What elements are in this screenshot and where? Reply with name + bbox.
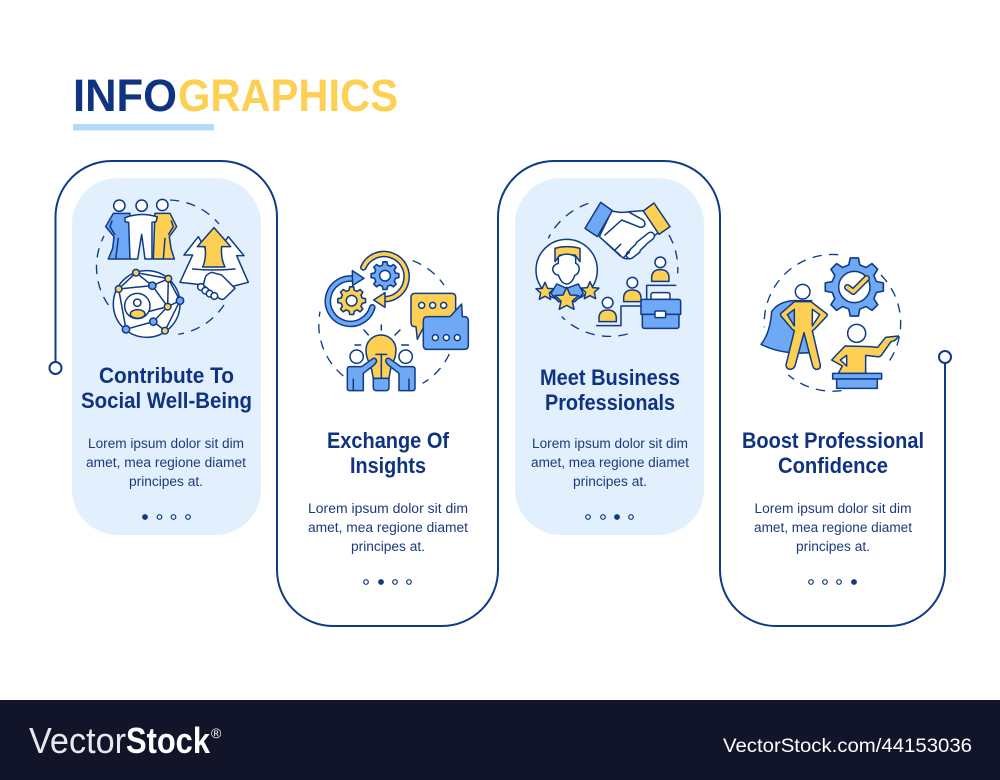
pagination dots: card 2 bbox=[364, 580, 411, 584]
card 3 text bbox=[531, 365, 689, 489]
cycle arrows and gears bbox=[328, 254, 407, 324]
body text: card 1 bbox=[86, 436, 246, 489]
pagination dots: card 3 bbox=[586, 515, 633, 519]
body text: card 4 bbox=[754, 501, 912, 554]
body text: card 1: principes at. bbox=[129, 474, 203, 489]
handshake bbox=[585, 202, 670, 259]
pagination dots: card 1 bbox=[143, 515, 190, 519]
footer logo: Stock bbox=[126, 720, 211, 761]
gear with check mark bbox=[825, 258, 883, 316]
panel background: card 1 bbox=[72, 178, 261, 535]
card 2 text bbox=[308, 428, 468, 554]
card 4 text bbox=[742, 428, 924, 554]
person with cape bbox=[761, 284, 827, 369]
heading: card 4: Confidence bbox=[778, 453, 888, 478]
title bbox=[73, 70, 398, 121]
icon: community, growth and network bbox=[96, 199, 248, 337]
title: GRAPHICS bbox=[178, 70, 398, 121]
body text: card 4: amet, mea regione diamet bbox=[754, 520, 912, 535]
footer logo: ® bbox=[211, 725, 222, 741]
footer logo bbox=[29, 720, 222, 761]
people group bbox=[106, 199, 177, 259]
footer image id: VectorStock.com/44153036 bbox=[723, 736, 972, 757]
heading: card 1: Social Well-Being bbox=[81, 388, 252, 413]
body text: card 3: principes at. bbox=[573, 474, 647, 489]
speech bubbles bbox=[411, 293, 468, 349]
heading: card 1: Contribute To bbox=[99, 363, 234, 388]
career stairs with people and briefcase bbox=[597, 257, 681, 328]
heading: card 2: Exchange Of bbox=[327, 428, 450, 453]
title underline bbox=[73, 124, 214, 130]
body text: card 2: Lorem ipsum dolor sit dim bbox=[308, 501, 468, 516]
heading: card 2: Insights bbox=[350, 453, 426, 478]
heading: card 2 bbox=[327, 428, 450, 478]
heading: card 4 bbox=[742, 428, 924, 478]
heading: card 1 bbox=[81, 363, 252, 413]
body text: card 3 bbox=[531, 436, 689, 489]
professional with stars bbox=[536, 239, 599, 309]
pagination dots: card 4 bbox=[809, 580, 856, 584]
person at podium bbox=[832, 324, 898, 388]
body text: card 4: principes at. bbox=[796, 539, 870, 554]
body text: card 2: amet, mea regione diamet bbox=[308, 520, 468, 535]
arrows and handshake bbox=[180, 228, 248, 299]
connected outline frame bbox=[50, 161, 951, 626]
body text: card 3: amet, mea regione diamet bbox=[531, 455, 689, 470]
network globe bbox=[113, 269, 184, 337]
icon: boost professional confidence bbox=[761, 254, 901, 391]
heading: card 4: Boost Professional bbox=[742, 428, 924, 453]
footer logo: Vector bbox=[29, 720, 126, 761]
icon: meet business professionals bbox=[536, 202, 681, 336]
light bulb and two people bbox=[347, 325, 415, 391]
body text: card 4: Lorem ipsum dolor sit dim bbox=[754, 501, 912, 516]
icon: exchange of insights bbox=[319, 254, 468, 391]
body text: card 1: amet, mea regione diamet bbox=[86, 455, 246, 470]
body text: card 3: Lorem ipsum dolor sit dim bbox=[532, 436, 688, 451]
body text: card 2 bbox=[308, 501, 468, 554]
card 1 text bbox=[81, 363, 252, 489]
title: INFO bbox=[73, 70, 177, 121]
footer bar bbox=[0, 700, 1000, 780]
body text: card 1: Lorem ipsum dolor sit dim bbox=[88, 436, 244, 451]
heading: card 3: Professionals bbox=[545, 390, 675, 415]
body text: card 2: principes at. bbox=[351, 539, 425, 554]
heading: card 3 bbox=[540, 365, 680, 415]
panel background: card 3 bbox=[515, 178, 704, 535]
heading: card 3: Meet Business bbox=[540, 365, 680, 390]
